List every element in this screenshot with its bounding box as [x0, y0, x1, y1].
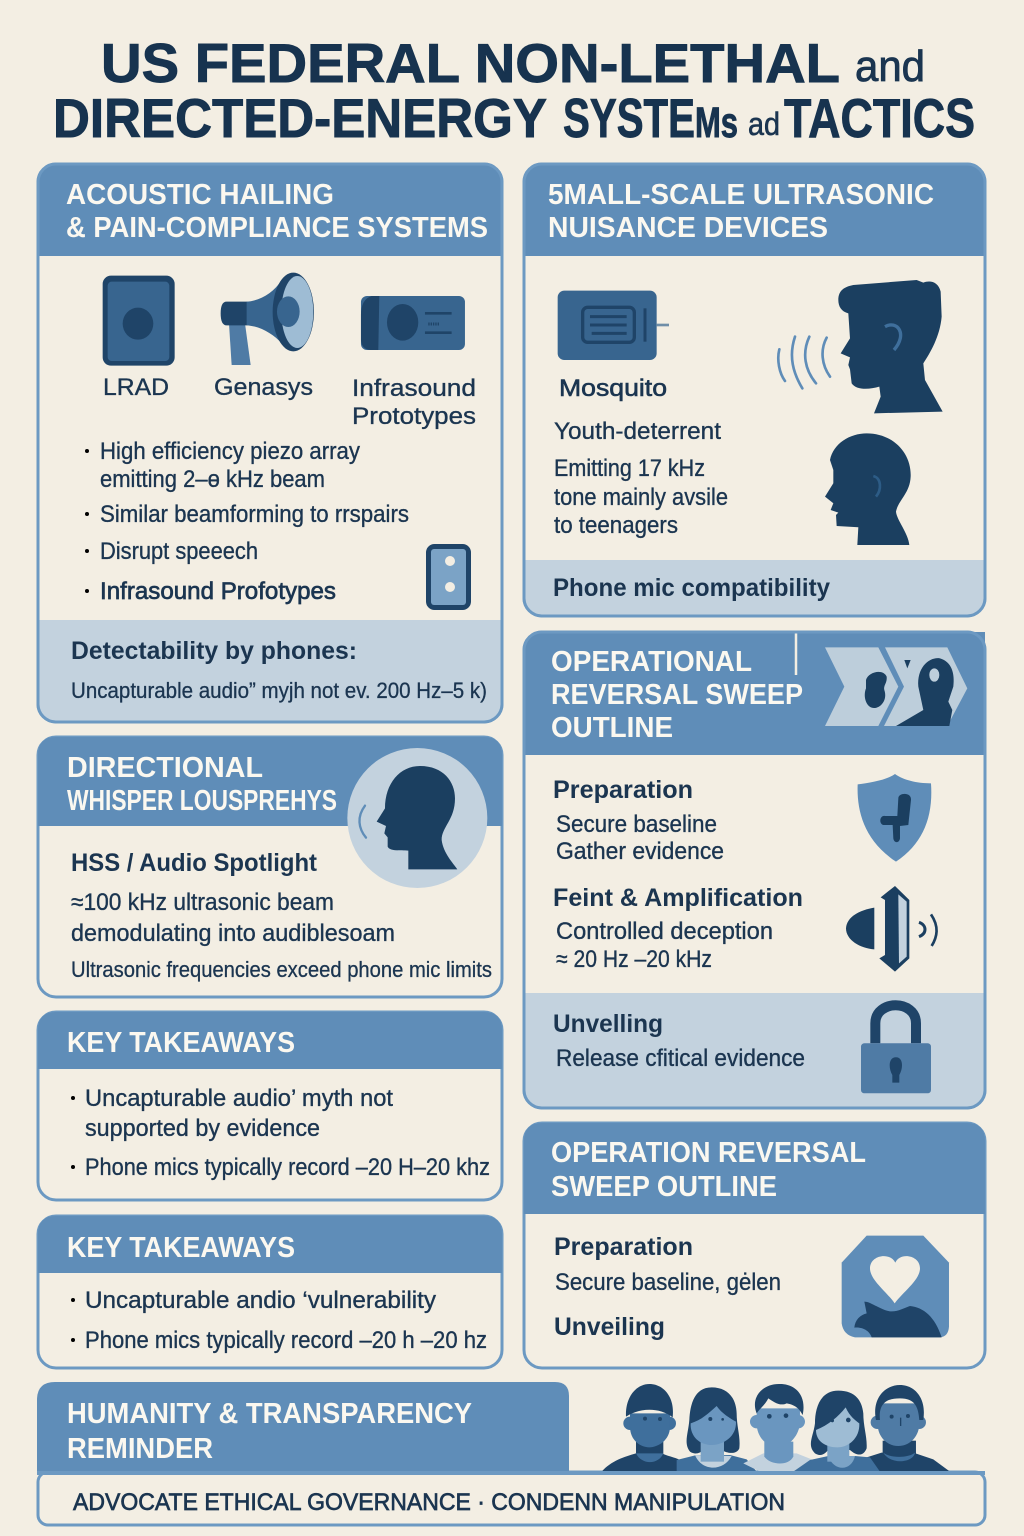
heading: ultrasonic nuisance devices: 5MALL-SCALE ULTRASONIC — [548, 179, 934, 211]
bullet list: acoustic systems: Disrupt speeech — [100, 538, 258, 565]
heading: acoustic hailing: & PAIN-COMPLIANCE SYSTEMS — [66, 212, 488, 244]
bullet list: takeaways 2: Uncapturable andio ‘vulnerability — [85, 1287, 436, 1314]
bullet list: takeaways 1: Uncapturable audio’ myth not — [85, 1085, 393, 1112]
step: feint and amplification — [553, 884, 803, 973]
icon: Genasys megaphone — [221, 273, 314, 365]
icon: shield — [858, 774, 931, 862]
panel: directional whisper loudspeakers — [38, 737, 502, 997]
bullet list: takeaways 1: supported by evidence — [85, 1115, 320, 1142]
text: HSS audio spotlight: ≈100 kHz ultrasonic beam — [71, 889, 334, 916]
person 1 — [602, 1384, 700, 1472]
panel: operational reversal sweep — [524, 631, 985, 1108]
heading: operational reversal sweep outline: OUTLINE — [551, 712, 673, 744]
footer: detectability by phones: Detectability by phones: — [71, 637, 357, 665]
title: ad — [748, 106, 780, 142]
title: US FEDERAL NON-LETHAL — [101, 32, 840, 94]
device labels: LRAD — [103, 374, 169, 401]
icon: small device — [428, 546, 470, 608]
heading: humanity reminder: HUMANITY & TRANSPARENCY — [67, 1398, 472, 1430]
person 3 — [743, 1384, 813, 1472]
title: SYSTE — [563, 87, 695, 149]
panel: ultrasonic nuisance devices — [524, 164, 985, 616]
heading: operation reversal: SWEEP OUTLINE — [551, 1171, 777, 1203]
heading: humanity reminder: REMINDER — [67, 1433, 213, 1465]
text: HSS audio spotlight: demodulating into audiblesoam — [71, 920, 395, 947]
text: preparation and unveiling: Unveiling — [554, 1313, 665, 1341]
text: mosquito description: Emitting 17 kHz — [554, 455, 705, 482]
step: unveiling: Release cfitical evidence — [556, 1045, 805, 1072]
heading: operational reversal sweep outline — [551, 646, 803, 744]
text: preparation and unveiling — [554, 1233, 781, 1341]
heading: operational reversal sweep outline: REVERSAL SWEEP — [551, 679, 803, 711]
device labels — [103, 374, 476, 430]
panel: key takeaways 2 — [38, 1216, 502, 1368]
text: preparation and unveiling: Preparation — [554, 1233, 693, 1261]
bullet list: acoustic systems: Infrasound Profotypes — [100, 578, 336, 605]
title: DIRECTED-ENERGY — [53, 87, 547, 149]
icon: group of five people — [602, 1384, 950, 1472]
device labels: Infrasound — [352, 375, 476, 402]
icon: padlock — [861, 1005, 931, 1093]
text: mosquito description — [554, 375, 728, 539]
footer: detectability by phones: Uncapturable audio” myjh not ev. 200 Hz–5 k) — [71, 678, 487, 703]
heading: directional whisper: WHISPER LOUSPREHYS — [67, 785, 337, 817]
step: feint and amplification: Controlled deception — [556, 918, 773, 945]
step: preparation: Preparation — [553, 776, 693, 804]
heading: ultrasonic nuisance devices: NUISANCE DEVICES — [548, 212, 828, 244]
heading: operation reversal: OPERATION REVERSAL — [551, 1137, 866, 1169]
person 4 — [793, 1391, 880, 1472]
bullet list: takeaways 2: Phone mics typically record –20 h –20 hz — [85, 1327, 487, 1354]
title: and — [855, 42, 925, 91]
step: unveiling — [553, 1010, 805, 1072]
footer: phone mic compatibility: Phone mic compatibility — [553, 574, 830, 602]
icon: head in circle — [347, 748, 487, 888]
title: Ms — [695, 99, 738, 147]
heading: operation reversal — [551, 1137, 866, 1203]
bullet list: takeaways 1: Phone mics typically record –20 H–20 khz — [85, 1154, 490, 1181]
step: preparation: Secure baseline — [556, 811, 717, 838]
text: mosquito description: Youth-deterrent — [554, 418, 721, 445]
heading: key takeaways: KEY TAKEAWAYS — [67, 1027, 295, 1059]
bullet list: takeaways 1 — [71, 1085, 490, 1181]
heading: acoustic hailing — [66, 179, 488, 244]
banner: ethical governance: ADVOCATE ETHICAL GOVERNANCE · CONDENN MANIPULATION — [73, 1489, 785, 1516]
icon: reversal chevrons with heads — [825, 647, 967, 726]
step: feint and amplification: ≈ 20 Hz –20 kHz — [556, 946, 712, 973]
step: preparation — [553, 776, 724, 865]
text: HSS audio spotlight: Ultrasonic frequencies exceed phone mic limits — [71, 957, 492, 982]
title — [53, 32, 975, 149]
bullet list: takeaways 2 — [71, 1287, 487, 1354]
person 2 — [677, 1387, 757, 1472]
bullet list: acoustic systems: emitting 2–ɵ kHz beam — [100, 466, 325, 493]
heading: operational reversal sweep outline: OPERATIONAL — [551, 646, 752, 678]
icon: teenager head — [825, 433, 911, 545]
person 5 — [847, 1385, 950, 1472]
heading: key takeaways: KEY TAKEAWAYS — [67, 1232, 295, 1264]
icon: speaker — [846, 886, 937, 972]
icon: infrasound prototype device — [361, 296, 465, 350]
title: TACTICS — [784, 87, 975, 149]
text: mosquito description: tone mainly avsile — [554, 484, 728, 511]
step: feint and amplification: Feint & Amplification — [553, 884, 803, 912]
text: HSS audio spotlight — [71, 849, 492, 982]
heading: ultrasonic nuisance devices — [548, 179, 934, 244]
text: mosquito description: to teenagers — [554, 512, 678, 539]
icon: heart and hand — [842, 1236, 949, 1337]
heading: directional whisper — [67, 752, 337, 817]
heading: directional whisper: DIRECTIONAL — [67, 752, 263, 784]
step: preparation: Gather evidence — [556, 838, 724, 865]
heading: humanity reminder — [67, 1398, 472, 1465]
panel: humanity and transparency reminder — [37, 1382, 985, 1525]
footer: detectability by phones — [71, 637, 487, 703]
text: preparation and unveiling: Secure baseline, gėlen — [555, 1269, 781, 1296]
device labels: Prototypes — [352, 403, 476, 430]
bullet list: acoustic systems: Similar beamforming to rrspairs — [100, 501, 409, 528]
panel: key takeaways 1 — [38, 1012, 502, 1200]
text: HSS audio spotlight: HSS / Audio Spotlight — [71, 849, 318, 877]
bullet list: acoustic systems: High efficiency piezo array — [100, 438, 360, 465]
text: mosquito description: Mosquito — [559, 375, 667, 402]
panel: operation reversal sweep outline — [524, 1123, 985, 1368]
icon: LRAD panel speaker — [103, 276, 175, 366]
device labels: Genasys — [214, 374, 313, 401]
icon: mosquito device — [558, 291, 669, 360]
icon: adult head with sound waves — [778, 280, 943, 413]
step: unveiling: Unvelling — [553, 1010, 663, 1038]
heading: acoustic hailing: ACOUSTIC HAILING — [66, 179, 334, 211]
panel: acoustic hailing — [38, 164, 502, 722]
bullet list: acoustic systems — [85, 438, 409, 605]
